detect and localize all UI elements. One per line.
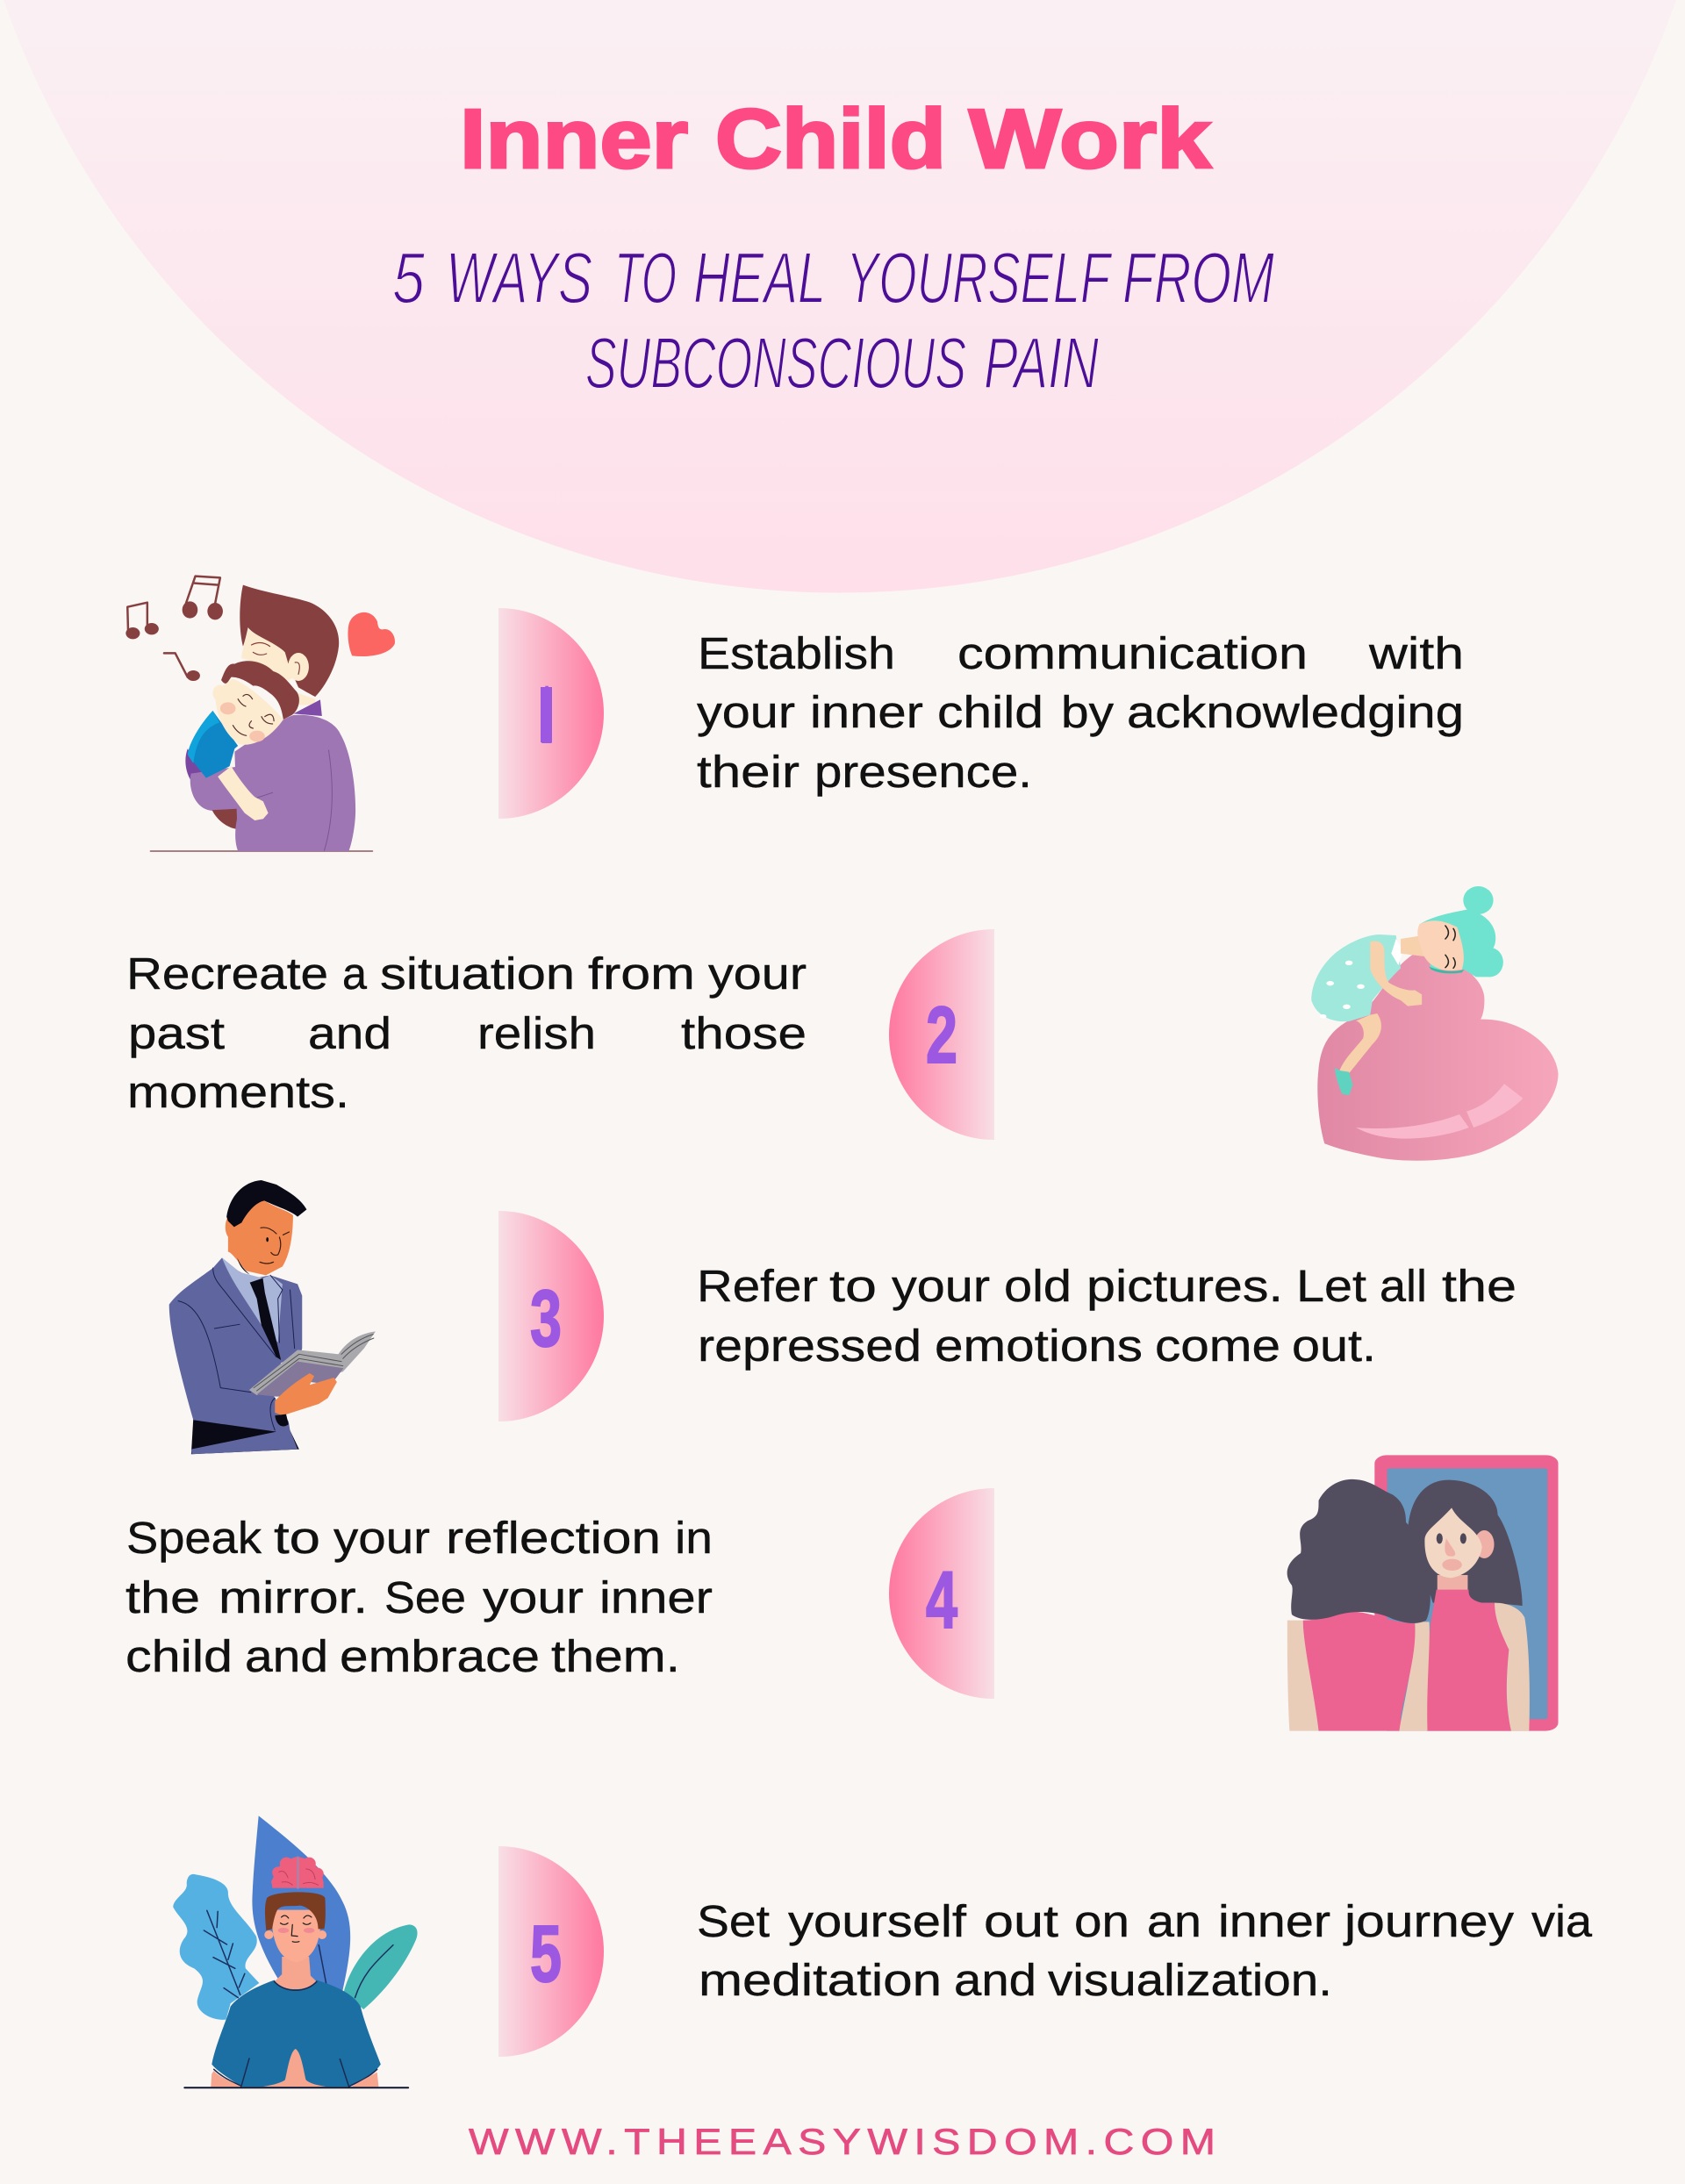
text: step 3: come [1155, 1321, 1280, 1371]
text: step 4: to [274, 1513, 320, 1563]
subtitle: WAYS [446, 237, 592, 319]
text: step 1: with [1368, 628, 1464, 678]
text: step 4: your [483, 1572, 584, 1622]
text: step 3: Refer [697, 1261, 818, 1311]
text: step 2: past [128, 1008, 225, 1058]
text: step 2: a [342, 949, 368, 999]
icon: girl hugging pink heart [1311, 886, 1559, 1161]
text: step 4: reflection [446, 1513, 661, 1563]
step 5 panel [173, 1815, 1593, 2087]
text: step 4 [125, 1513, 713, 1681]
text: step 4: your [333, 1513, 430, 1563]
text: step 5 [697, 1896, 1593, 2005]
text: step 3: the [1442, 1261, 1516, 1311]
text: step 4: See [384, 1572, 466, 1622]
text: step 5: inner [1218, 1896, 1330, 1946]
text: step 5: via [1531, 1896, 1593, 1946]
step 3 panel [169, 1180, 1516, 1454]
text: step 1: communication [957, 628, 1308, 678]
text: step 3: emotions [935, 1321, 1143, 1371]
text: step 3: old [1004, 1261, 1072, 1311]
text: step 3: to [829, 1261, 877, 1311]
title: Work [969, 92, 1212, 186]
text: step 4: them. [551, 1631, 680, 1681]
footer website: WWW.THEEASYWISDOM.COM [469, 2121, 1215, 2162]
text: step 3: Let [1296, 1261, 1366, 1311]
text: step 3: your [892, 1261, 990, 1311]
icon: meditating man with brain and leaves [173, 1815, 418, 2087]
text: step 4: inner [599, 1572, 713, 1622]
text: step 4: Speak [126, 1513, 262, 1563]
subtitle: YOURSELF [846, 237, 1113, 319]
text: step 2 [126, 949, 807, 1117]
text: step 5: Set [697, 1896, 770, 1946]
title: Child [715, 92, 946, 186]
icon: man in suit reading a book [169, 1180, 376, 1454]
text: step 5: meditation [699, 1955, 942, 2005]
text: step 4: the [125, 1572, 200, 1622]
text: step 4: and [245, 1631, 328, 1681]
text: step 1: child [937, 687, 1043, 737]
text: step 1 [697, 628, 1464, 797]
text: step 4: child [125, 1631, 233, 1681]
step 2 panel [126, 886, 1559, 1161]
number badge 4 [889, 1488, 994, 1699]
subtitle: 5 [392, 237, 426, 319]
subtitle: SUBCONSCIOUS [585, 322, 966, 404]
number badge 2: 2 [926, 991, 957, 1080]
number badge 2 [889, 929, 994, 1140]
title [460, 92, 1212, 186]
text: step 1: inner [810, 687, 923, 737]
number badge 1: 1 [541, 670, 552, 760]
text: step 3: repressed [698, 1321, 921, 1371]
text: step 1: Establish [698, 628, 895, 678]
subtitle: HEAL [693, 237, 825, 319]
icon: woman looking at her reflection in a mirror [1287, 1455, 1559, 1731]
header pink arc [4, 0, 1676, 592]
text: step 5: an [1147, 1896, 1201, 1946]
text: step 1: acknowledging [1127, 687, 1464, 737]
text: step 2: from [588, 949, 695, 999]
text: step 5: yourself [788, 1896, 967, 1946]
text: step 5: and [954, 1955, 1036, 2005]
text: step 3 [697, 1261, 1516, 1371]
text: step 4: in [675, 1513, 713, 1563]
text: step 1: their [697, 747, 799, 797]
number badge 5: 5 [530, 1909, 562, 1999]
text: step 5: out [984, 1896, 1058, 1946]
text: step 3: all [1380, 1261, 1427, 1311]
text: step 2: your [708, 949, 807, 999]
text: step 3: pictures. [1086, 1261, 1283, 1311]
text: step 5: on [1074, 1896, 1129, 1946]
text: step 2: relish [477, 1008, 596, 1058]
subtitle [392, 237, 1275, 404]
number badge 5 [498, 1846, 604, 2057]
text: step 5: journey [1343, 1896, 1515, 1946]
subtitle: FROM [1122, 237, 1275, 319]
number badge 4: 4 [926, 1556, 957, 1645]
text: step 2: and [308, 1008, 391, 1058]
text: step 1: your [697, 687, 795, 737]
text: step 2: moments. [127, 1067, 349, 1117]
text: step 2: situation [380, 949, 575, 999]
text: step 3: out. [1292, 1321, 1376, 1371]
text: step 2: Recreate [126, 949, 328, 999]
text: step 4: mirror. [219, 1572, 368, 1622]
step 4 panel [125, 1455, 1559, 1731]
subtitle: PAIN [984, 322, 1099, 404]
text: step 1: presence. [814, 747, 1032, 797]
text: step 2: those [681, 1008, 807, 1058]
text: step 1: by [1061, 687, 1115, 737]
subtitle: TO [614, 237, 677, 319]
step 1 panel [125, 576, 1464, 851]
number badge 3 [498, 1211, 604, 1421]
text: step 4: embrace [340, 1631, 540, 1681]
title: Inner [460, 92, 688, 186]
number badge 1 [498, 608, 604, 819]
number badge 3: 3 [530, 1274, 562, 1364]
icon: father hugging child with music notes [125, 576, 395, 851]
text: step 5: visualization. [1048, 1955, 1332, 2005]
